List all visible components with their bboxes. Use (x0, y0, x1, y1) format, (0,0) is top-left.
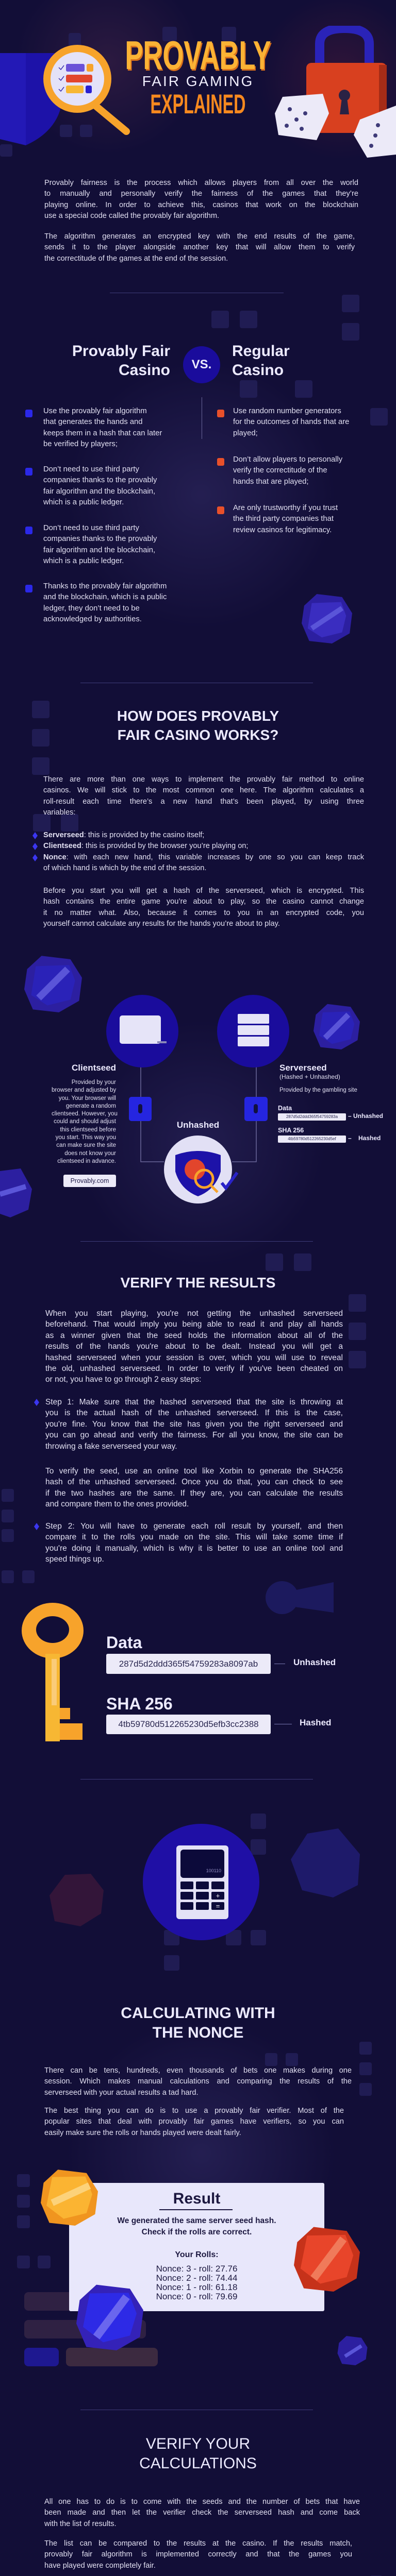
step 1: you can go ahead and verify the fairness. For all you know, the site can be (45, 1431, 343, 1439)
nonce text 2: popular sites that deal with provably fair games have verifiers, so you can (44, 2117, 344, 2126)
list: provably fair: companies thanks to the provably (43, 535, 157, 543)
verify text: or not, you have to go through 2 easy steps: (45, 1375, 201, 1384)
how it works text: casinos. We will stick to the most common one here. The algorithm calculates a (43, 786, 364, 794)
intro text: playing online. In order to achieve this, casinos that work on the blockchain (44, 201, 358, 209)
step 2: Step 2: You will have to generate each roll result by yourself, and then (45, 1522, 343, 1531)
list: provably fair: Don’t need to use third party (43, 524, 139, 532)
diagram: seeds (52, 995, 383, 1204)
result card: Nonce: 1 - roll: 61.18 (156, 2282, 237, 2292)
icon: padlock and dice (275, 26, 396, 158)
hash text: it no matter what. Also, because it comes to you in an encrypted code, you (43, 909, 364, 917)
step 1: throwing a fake serverseed your way. (45, 1442, 177, 1451)
variables list: Nonce: with each new hand, this variable increases by one so you can keep track (43, 853, 364, 861)
icon: calculator circle: + (216, 1892, 220, 1900)
step 1: you is the actual hash of the unhashed serverseed. If this is the case, (45, 1409, 343, 1417)
list: regular: Don’t allow players to personally (233, 455, 342, 464)
step 2: you're doing it manually, which is why it is better to use an online tool and (45, 1544, 343, 1553)
icon: laptop circle (106, 995, 178, 1067)
heading: verify the results: VERIFY THE RESULTS (121, 1275, 275, 1291)
icon: gem blue small (337, 2336, 367, 2365)
intro text (44, 179, 358, 220)
mini data hashes: – Unhashed (348, 1112, 383, 1120)
verify calc text 2: have played were completely fair. (44, 2562, 156, 2570)
list: regular: review casinos for legitimacy. (233, 526, 332, 534)
verify text: When you start playing, you're not getting the unhashed serverseed (45, 1309, 343, 1318)
mini data hashes (278, 1105, 383, 1143)
clientseed description: could and should adjust (54, 1118, 116, 1125)
data hash block: SHA 256 (106, 1694, 173, 1713)
how it works text: roll-result each time there’s a new hand that’s been played, by using three (43, 798, 364, 806)
verify seed text (45, 1467, 343, 1509)
verify calc text: been made and then let the verifier check the serverseed hash and come back (44, 2509, 360, 2517)
heading: provably fair casino: Casino (119, 362, 170, 379)
title: PROVABLY (125, 32, 271, 78)
result card: We generated the same server seed hash. (117, 2216, 276, 2225)
icon: shield and magnifier (0, 45, 130, 145)
list: provably fair: be verified by players; (43, 440, 118, 448)
clientseed label: Clientseed (72, 1063, 116, 1073)
clientseed description: Provided by your (72, 1079, 116, 1086)
nonce text 2 (44, 2107, 344, 2137)
clientseed description: clientseed. However, you (52, 1111, 118, 1117)
button: provably.com: Provably.com (71, 1177, 109, 1184)
list: provably fair: fair algorithm and the blockchain, (43, 487, 155, 496)
verify text: hashed serverseed when your session is over, which you will use to reveal (45, 1353, 343, 1362)
result card: Nonce: 3 - roll: 27.76 (156, 2264, 237, 2274)
list: provably fair: fair algorithm and the blockchain, (43, 546, 155, 554)
verify text: as a winner given that the seed holds the information about all of the (45, 1331, 343, 1340)
list: provably fair: acknowledged by authorities. (43, 615, 142, 623)
verify seed text: and compare them to the ones provided. (45, 1500, 189, 1509)
title: EXPLAINED (150, 89, 246, 120)
icon: calculator circle: = (216, 1902, 220, 1910)
list: regular: played; (233, 429, 258, 437)
step 1: Step 1: Make sure that the hashed serverseed that the site is throwing at (45, 1398, 343, 1406)
diagram: seeds: (Hashed + Unhashed) (279, 1073, 340, 1080)
icon: gem blue large (76, 2284, 143, 2350)
result card: Nonce: 2 - roll: 74.44 (156, 2273, 237, 2283)
text: Unhashed (293, 1657, 336, 1667)
text: Hashed (300, 1718, 331, 1727)
verify calc text (44, 2498, 360, 2528)
clientseed description: does not know your (64, 1150, 116, 1157)
list: regular (217, 407, 349, 534)
nonce text: serverseed with your actual results a tad hard. (44, 2089, 199, 2097)
data hash block (106, 1633, 336, 1734)
icon: vs circle: VS. (192, 358, 211, 371)
how it works text (43, 775, 364, 817)
title: FAIR GAMING (142, 73, 254, 89)
verify seed text: To verify the seed, use an online tool like Xorbin to generate the SHA256 (45, 1467, 343, 1476)
list: provably fair: which is a public ledger. (43, 498, 124, 506)
icon: faded gems (50, 1828, 360, 1926)
verify seed text: if the two hashes are the same. If they are, you can calculate the results (45, 1489, 343, 1498)
data hash block: Data (106, 1633, 142, 1652)
list: provably fair: Thanks to the provably fair algorithm (43, 582, 167, 590)
intro text: to manually and personally verify the fairness of the games that they’re (44, 190, 358, 198)
step 2: speed things up. (45, 1555, 104, 1564)
heading: regular casino (232, 343, 290, 379)
heading: how does provably fair casino works (117, 708, 279, 743)
hash text: yourself cannot calculate any results for the hands you’re about to play. (43, 920, 280, 928)
title (125, 32, 272, 120)
heading: verify your calculations (139, 2435, 257, 2472)
heading: how does provably fair casino works: HOW DOES PROVABLY (117, 708, 279, 724)
intro text 2: The algorithm generates an encrypted key with the end results of the game, (44, 232, 355, 241)
heading: verify your calculations: CALCULATIONS (139, 2455, 257, 2472)
nonce text 2: easily make sure the rolls or hands played were dealt fairly. (44, 2129, 241, 2137)
list: regular: verify the correctitude of the (233, 466, 327, 474)
icon: server circle (217, 995, 289, 1067)
variables list: Serverseed: this is provided by the casino itself; (43, 831, 204, 839)
icon: lock right (244, 1097, 268, 1121)
verify calc text 2 (44, 2539, 352, 2570)
clientseed description: this clientseed before (60, 1127, 116, 1133)
heading: how does provably fair casino works: FAIR CASINO WORKS? (118, 727, 278, 743)
step 1 (34, 1398, 343, 1451)
how it works text: There are more than one ways to implement the provably fair method to online (43, 775, 364, 784)
mini data hashes: – Hashed (348, 1134, 381, 1142)
intro text 2 (44, 232, 355, 263)
step 1: you're fine. You know that the site has given you the right serverseed and (45, 1420, 343, 1429)
list: provably fair: Don’t need to use third party (43, 465, 139, 473)
list: regular: Are only trustworthy if you trust (233, 504, 338, 512)
clientseed description: you start. This way you (56, 1134, 116, 1141)
result card: Result (173, 2190, 220, 2207)
result card (69, 2183, 324, 2311)
heading: provably fair casino (72, 343, 170, 379)
clientseed description: you. Your browser will (59, 1095, 116, 1101)
list: provably fair: companies thanks to the provably (43, 476, 157, 484)
verify seed text: hash of the unhashed serverseed. Once you do that, you can check to see (45, 1478, 343, 1486)
clientseed description: clientseed in advance. (57, 1158, 116, 1164)
intro text: use a special code called the provably fair algorithm. (44, 212, 219, 220)
hash text: hash contains the entire game you’re about to play, so the casino cannot change (43, 897, 364, 906)
heading: regular casino: Casino (232, 362, 284, 379)
icon: gem left (24, 956, 82, 1012)
list: provably fair: Use the provably fair algorithm (43, 407, 147, 415)
list: regular: for the outcomes of hands that are (233, 418, 349, 426)
mini data hashes: SHA 256 (278, 1127, 304, 1134)
intro text: Provably fairness is the process which allows players from all over the world (44, 179, 358, 187)
list: provably fair: keeps them in a hash that can later (43, 429, 162, 437)
list: regular: hands that are played; (233, 478, 308, 486)
mini data hashes: 287d5d2ddd365f54759283a (286, 1114, 338, 1119)
list: regular: the third party companies that (233, 515, 334, 523)
clientseed description: generate a random (66, 1103, 116, 1109)
result card: Check if the rolls are correct. (142, 2228, 252, 2236)
icon: key (22, 1603, 84, 1741)
step 2 (34, 1522, 343, 1564)
button: provably.com (63, 1175, 116, 1187)
hash text: Before you start you will get a hash of the serverseed, which is encrypted. This (43, 887, 364, 895)
unhashed label: Unhashed (177, 1120, 219, 1130)
icon: shield check circle (164, 1136, 238, 1204)
diagram: seeds: Provided by the gambling site (279, 1087, 357, 1093)
data hash block: 287d5d2ddd365f54759283a8097ab (119, 1659, 258, 1669)
heading: calculating with the nonce: CALCULATING WITH (121, 2005, 275, 2022)
serverseed label: Serverseed (279, 1063, 327, 1073)
variables list (32, 831, 364, 872)
icon: keyhole decor (266, 1581, 334, 1614)
heading: verify your calculations: VERIFY YOUR (146, 2435, 250, 2452)
icon: lock left (129, 1097, 152, 1121)
step 2: compare it to the rolls you made on the site. This will take some time if (45, 1533, 343, 1541)
verify calc text 2: The list can be compared to the results at the casino. If the results match, (44, 2539, 352, 2548)
heading: provably fair casino: Provably Fair (72, 343, 170, 360)
verify text (45, 1309, 343, 1384)
intro text 2: sends it to the player alongside another key that will allow them to verify (44, 243, 355, 251)
nonce text 2: The best thing you can do is to use a provably fair verifier. Most of the (44, 2107, 344, 2115)
faded bars (24, 2292, 158, 2366)
intro text 2: the correctitude of the games at the end of the session. (44, 255, 228, 263)
list: regular: Use random number generators (233, 407, 341, 415)
result card: Nonce: 0 - roll: 79.69 (156, 2292, 237, 2301)
mini data hashes: 4tb59780d512265230d5ef (288, 1137, 336, 1141)
result card: Your Rolls: (175, 2250, 219, 2259)
nonce text (44, 2066, 352, 2097)
icon: gem red (294, 2227, 360, 2292)
variables list: Clientseed: this is provided by the browser you’re playing on; (43, 842, 248, 850)
clientseed description: can make sure the site (56, 1142, 116, 1148)
list: provably fair: that generates the hands and (43, 418, 143, 426)
list: provably fair: which is a public ledger. (43, 557, 124, 565)
verify text: the old, unhashed serverseed. In order to verify if you've been cheated on (45, 1364, 343, 1373)
heading: regular casino: Regular (232, 343, 290, 360)
icon: vs circle (183, 346, 220, 383)
variables list: of which hand is which by the end of the session. (43, 864, 206, 872)
icon: gem blue (302, 594, 352, 643)
list: provably fair: ledger, they don’t need to be (43, 604, 140, 613)
verify text: beforehand. That would imply you being able to read it and play all hands (45, 1320, 343, 1329)
verify text: results of the hands you're about to be dealt. Instead you will get a (45, 1342, 343, 1351)
how it works text: variables: (43, 808, 75, 817)
icon: gem yellow (40, 2170, 98, 2226)
icon: gem left partial (0, 1168, 32, 1217)
nonce text: session. Which makes manual calculations and comparing the results of the (44, 2077, 352, 2086)
data hash block: 4tb59780d512265230d5efb3cc2388 (118, 1719, 259, 1729)
icon: calculator circle: 100110 (206, 1868, 221, 1873)
heading: calculating with the nonce (121, 2005, 275, 2041)
hash text (43, 887, 364, 928)
list: provably fair: and the blockchain, which is a public (43, 593, 167, 601)
icon: calculator circle (143, 1824, 259, 1940)
nonce text: There can be tens, hundreds, even thousands of bets one makes during one (44, 2066, 352, 2075)
heading: calculating with the nonce: THE NONCE (153, 2024, 243, 2041)
verify calc text 2: provably fair algorithm is implemented correctly and that the games you (44, 2550, 352, 2558)
verify calc text: with the list of results. (44, 2520, 117, 2528)
clientseed description: browser and adjusted by (52, 1087, 116, 1093)
icon: gem right (314, 1004, 360, 1049)
connector lines (140, 1067, 257, 1162)
list: provably fair (25, 407, 167, 623)
verify calc text: All one has to do is to come with the seeds and the number of bets that have (44, 2498, 360, 2506)
clientseed description (52, 1079, 118, 1164)
mini data hashes: Data (278, 1105, 292, 1112)
